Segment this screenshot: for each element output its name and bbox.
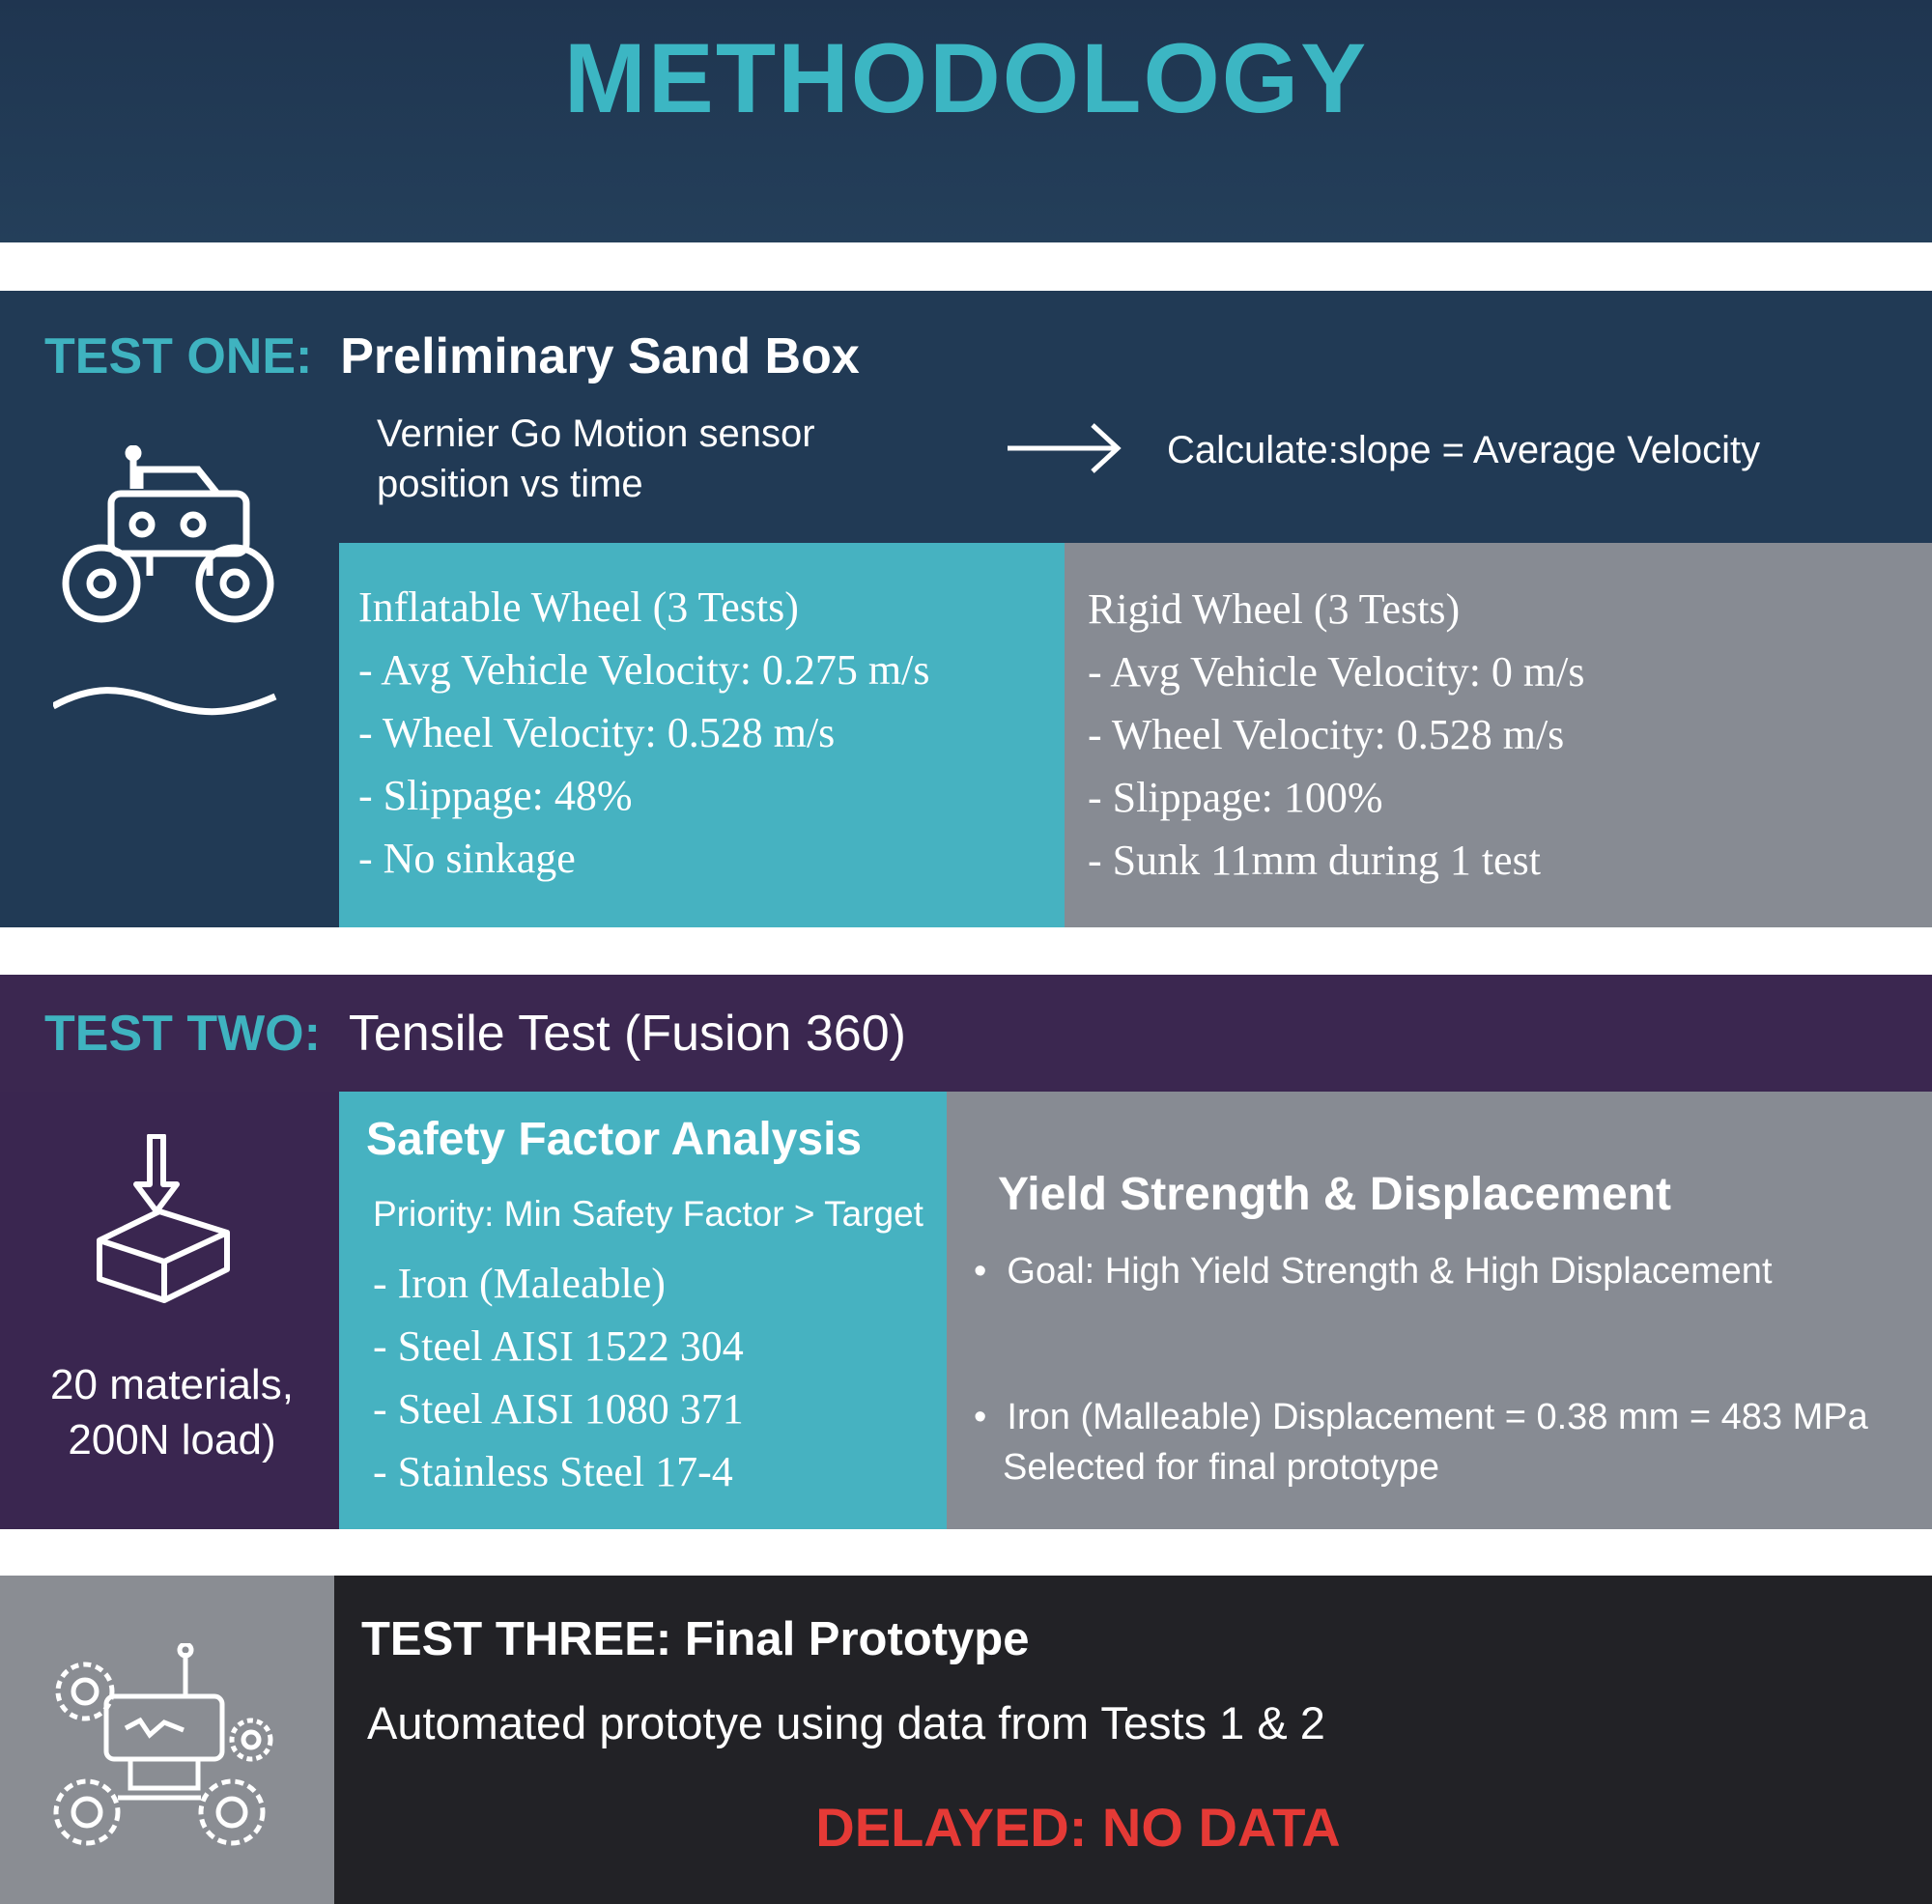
test three heading: TEST THREE: Final Prototype: [361, 1613, 1029, 1665]
panel: yield strength: [947, 1092, 1932, 1529]
materials text: 200N load): [68, 1416, 276, 1464]
calculate text: Calculate:slope = Average Velocity: [1167, 429, 1760, 471]
test one heading: TEST ONE: Preliminary Sand Box: [44, 328, 860, 384]
automated text: Automated prototye using data from Tests 1 & 2: [367, 1697, 1325, 1748]
panel: yield strength: Selected for final prototype: [1003, 1447, 1439, 1488]
panel: safety factor: - Iron (Maleable): [373, 1260, 666, 1307]
panel: inflatable wheel: [339, 543, 1065, 927]
icon: load box: [97, 1134, 230, 1303]
title: METHODOLOGY: [564, 23, 1368, 133]
panel: test one: [0, 291, 1932, 927]
panel: safety factor: Safety Factor Analysis: [366, 1114, 862, 1165]
arrow: [1008, 423, 1122, 473]
delayed text: DELAYED: NO DATA: [815, 1797, 1341, 1858]
panel: yield strength: • Iron (Malleable) Displacement = 0.38 mm = 483 MPa: [974, 1397, 1868, 1437]
materials text: 20 materials,: [50, 1361, 294, 1408]
panel: inflatable wheel: - Wheel Velocity: 0.528 m/s: [358, 709, 835, 756]
panel: inflatable wheel: - Slippage: 48%: [358, 772, 633, 819]
panel: test two: [0, 975, 1932, 1529]
panel: rigid wheel: [1065, 543, 1932, 927]
panel: rigid wheel: - Avg Vehicle Velocity: 0 m/s: [1088, 648, 1585, 696]
icon panel: [0, 1576, 334, 1904]
test two header bar: TEST TWO: Tensile Test (Fusion 360): [44, 1006, 906, 1062]
panel: yield strength: • Goal: High Yield Strength & High Displacement: [974, 1251, 1772, 1292]
panel: safety factor: - Steel AISI 1080 371: [373, 1385, 744, 1433]
header band: [0, 0, 1932, 242]
test two header bar: [0, 975, 1932, 1092]
panel: safety factor: - Stainless Steel 17-4: [373, 1448, 733, 1495]
panel: inflatable wheel: - No sinkage: [358, 835, 576, 882]
panel: test three: [0, 1576, 1932, 1904]
sensor text: Vernier Go Motion sensor position vs time: [377, 412, 815, 505]
panel: safety factor: - Steel AISI 1522 304: [373, 1322, 744, 1370]
panel: inflatable wheel: - Avg Vehicle Velocity: 0.275 m/s: [358, 646, 930, 694]
panel: safety factor: [339, 1092, 947, 1529]
panel: rigid wheel: - Wheel Velocity: 0.528 m/s: [1088, 711, 1564, 758]
panel: rigid wheel: - Slippage: 100%: [1088, 774, 1383, 821]
panel: rigid wheel: Rigid Wheel (3 Tests): [1088, 585, 1460, 633]
panel: rigid wheel: - Sunk 11mm during 1 test: [1088, 837, 1541, 884]
panel: inflatable wheel: Inflatable Wheel (3 Tests): [358, 583, 799, 631]
panel: safety factor: Priority: Min Safety Factor > Target: [373, 1194, 923, 1234]
materials text: [50, 1361, 294, 1464]
icon: rover: [53, 445, 276, 715]
panel: yield strength: Yield Strength & Displacement: [998, 1169, 1671, 1220]
